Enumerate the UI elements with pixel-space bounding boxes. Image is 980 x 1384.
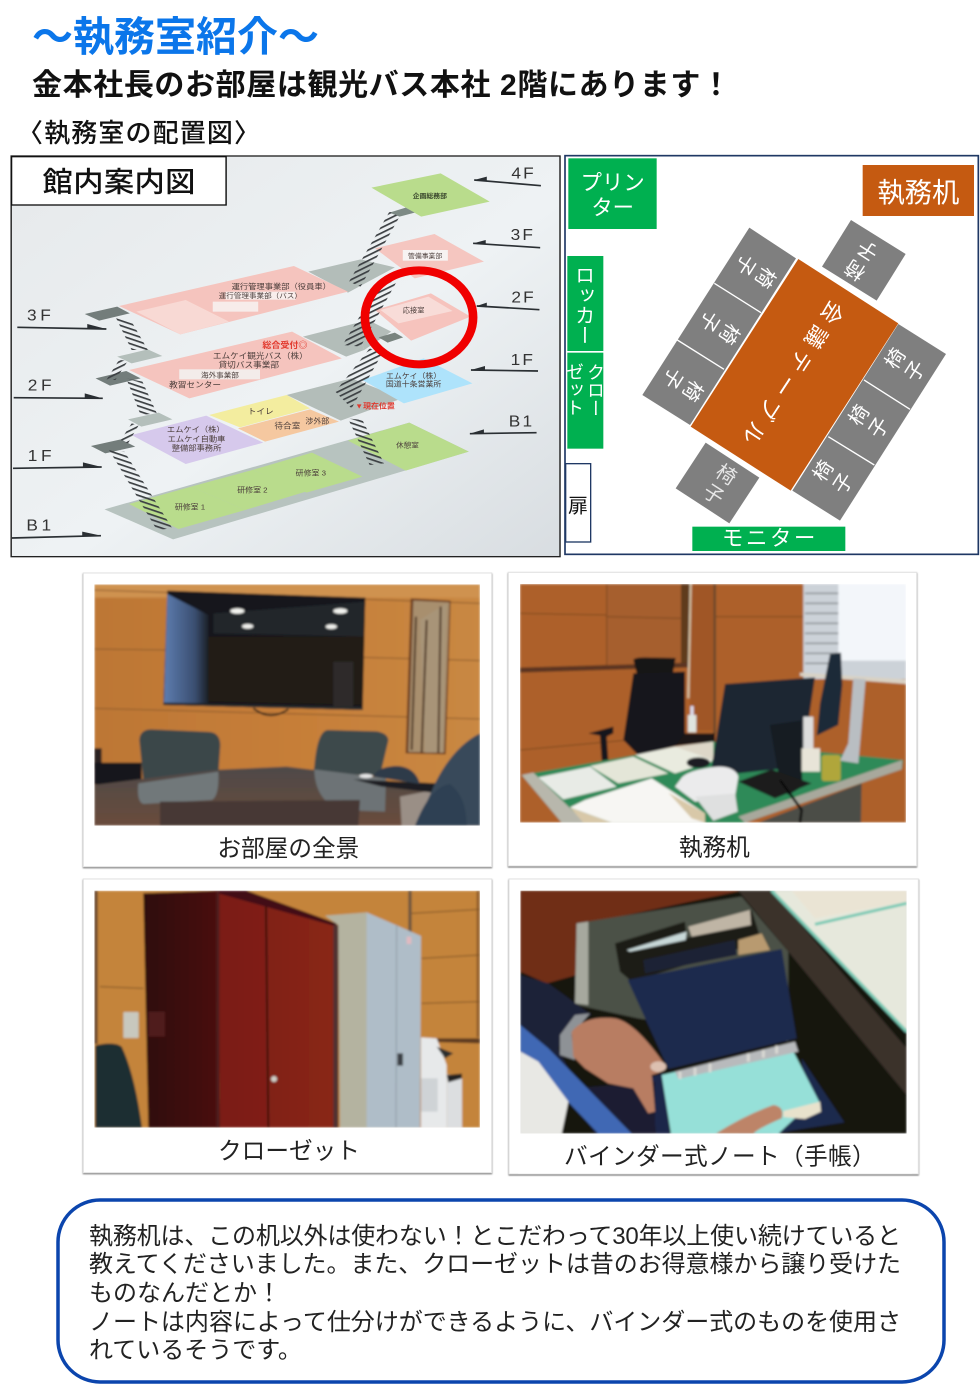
room labels: 休憩室 <box>396 441 419 450</box>
subtitle: 金本社長のお部屋は観光バス本社 2階にあります！ <box>32 69 731 102</box>
floor labels: 2F <box>28 376 55 395</box>
photo: desk, chair, monitors <box>520 584 906 823</box>
photo: closet, cabinet, printer <box>94 891 480 1128</box>
photo card: room overview <box>83 573 492 867</box>
monitor: モニター <box>722 526 815 550</box>
photo card: closet <box>83 879 492 1173</box>
photo card: executive desk <box>508 572 917 866</box>
floor plates <box>85 173 490 539</box>
map heading box: 館内案内図 <box>43 166 195 198</box>
section heading: layout: 〈執務室の配置図〉 <box>17 118 260 148</box>
closet: クロー <box>585 363 605 417</box>
chairs: left row: 椅子 <box>730 247 782 292</box>
room labels: 企画総務部 <box>413 191 447 200</box>
room labels: 教習センター <box>169 380 221 390</box>
room labels: 国道十条営業所 <box>386 379 442 389</box>
closet: ゼット <box>564 362 584 417</box>
locker: ロッカー <box>572 265 594 345</box>
callout: comment text box: ものなんだとか！ <box>89 1280 281 1307</box>
door <box>566 464 591 542</box>
floor labels: B1 <box>509 412 534 431</box>
executive desk <box>863 165 974 216</box>
door: 扉 <box>568 496 588 518</box>
chairs: left row: 椅子 <box>657 360 709 405</box>
chair: bottom <box>676 443 759 523</box>
room labels: 研修室 2 <box>237 485 268 494</box>
room labels: 総合受付◎ <box>262 339 308 350</box>
room labels: エムケイ（株） <box>167 424 225 434</box>
callout: comment text box <box>58 1200 944 1382</box>
caption: クローゼット <box>218 1138 360 1165</box>
stairs <box>106 212 400 530</box>
room labels: 渉外部 <box>305 416 330 425</box>
room labels: ▼現在位置 <box>355 401 395 410</box>
callout: comment text box: 執務机は、この机以外は使わない！とこだわって30年以上使い続けていると <box>89 1223 901 1250</box>
map heading box <box>12 157 226 205</box>
locker <box>567 256 603 351</box>
room labels: エムケイ観光バス（株） <box>213 351 308 361</box>
room labels: 海外事業部 <box>201 371 239 379</box>
room labels <box>167 191 447 511</box>
chairs: right row: 椅子 <box>842 401 894 446</box>
room labels: 応接室 <box>403 306 424 315</box>
chair: bottom: 椅子 <box>696 458 740 510</box>
floor labels: 1F <box>511 351 535 369</box>
panel: building guide map <box>11 156 560 557</box>
room labels: エムケイ（株） <box>386 371 441 380</box>
room labels: トイレ <box>248 406 274 416</box>
photo: hands holding binder <box>520 891 907 1134</box>
chair: top: 椅子 <box>841 235 886 287</box>
room labels: 研修室 3 <box>296 468 326 478</box>
executive desk: 執務机 <box>877 177 959 208</box>
room labels: 研修室 1 <box>175 502 205 511</box>
room labels: 貸切バス事業部 <box>219 360 279 369</box>
floor labels: 3F <box>27 306 54 324</box>
chairs: left row: 椅子 <box>694 303 746 348</box>
photo card: binder notebook <box>509 879 918 1174</box>
floor labels: B1 <box>26 516 55 534</box>
room labels: エムケイ自動車 <box>168 434 225 443</box>
floor labels <box>26 164 536 534</box>
closet <box>564 353 605 449</box>
floor labels: 4F <box>511 164 536 183</box>
monitor <box>692 526 845 551</box>
chairs: right row: 椅子 <box>879 344 931 389</box>
floor labels: 2F <box>511 288 536 307</box>
caption: バインダー式ノート（手帳） <box>564 1143 876 1170</box>
meeting table: 会議テーブル <box>737 296 848 449</box>
callout: comment text box: れているそうです。 <box>89 1337 302 1364</box>
room labels: 管備事業部 <box>408 251 443 260</box>
room labels: 待合室 <box>274 421 300 431</box>
floor labels: 3F <box>511 226 535 244</box>
room labels: 運行管理事業部（バス） <box>219 291 302 300</box>
chair: top <box>822 220 906 301</box>
printer <box>568 158 657 229</box>
printer: ター <box>591 196 634 220</box>
meeting table <box>691 259 898 491</box>
photo: wall, TV, chairs, table <box>94 584 480 826</box>
printer: プリン <box>581 171 645 195</box>
title: ～執務室紹介～ <box>32 14 319 60</box>
chairs: right row <box>792 324 946 521</box>
chairs: right row: 椅子 <box>807 457 859 501</box>
red circle highlight <box>365 270 473 364</box>
room labels: 整備部事務所 <box>172 443 221 452</box>
room labels: 運行管理事業部（役員車） <box>232 281 331 291</box>
chairs: left row <box>642 228 796 425</box>
panel: room layout plan <box>564 156 978 554</box>
callout: comment text box: ノートは内容によって仕分けができるように、バインダー式のものを使用さ <box>89 1309 901 1336</box>
caption: 執務机 <box>679 835 750 862</box>
callout: comment text box: 教えてくださいました。また、クローゼットは昔のお得意様から譲り受けた <box>89 1251 901 1278</box>
caption: お部屋の全景 <box>217 836 359 863</box>
floor labels: 1F <box>28 447 55 465</box>
floor arrows <box>12 177 541 538</box>
